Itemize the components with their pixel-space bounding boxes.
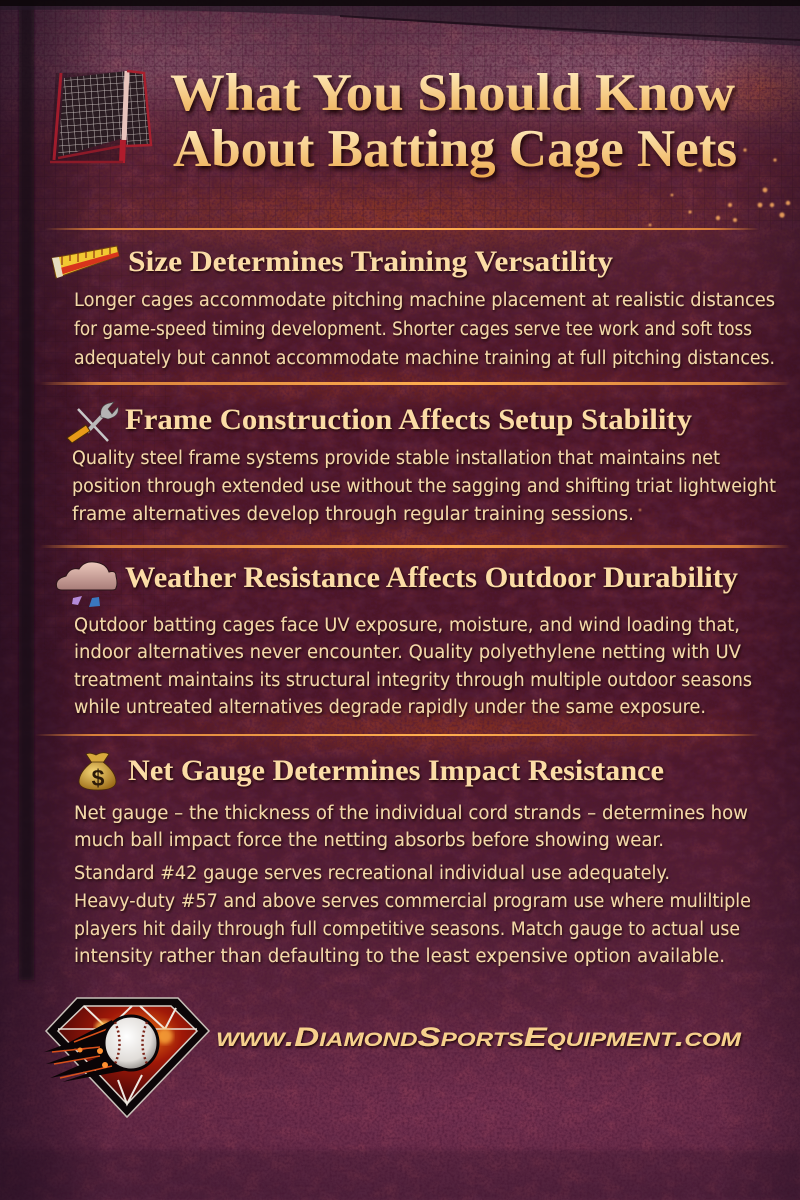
panel: gauge [74,753,751,967]
divider: size and frame [40,382,790,385]
text: weather body: treatment maintains its structural integrity through multiple outdoor seasons [74,670,752,691]
text: gauge body one [74,803,748,851]
icon: money bag [79,753,116,791]
icon: storm cloud [56,562,117,607]
heading: size: Size Determines Training Versatility [128,245,613,278]
website url: www.DiamondSportsEquipment.com [216,1022,742,1052]
icon: money bag: $ [92,765,105,791]
icon: crossed tools [67,402,118,443]
divider: top [45,228,760,230]
heading: weather: Weather Resistance Affects Outdoor Durability [125,561,738,594]
text: frame body: frame alternatives develop through regular training sessions. [72,504,634,525]
icon: ruler [52,246,119,278]
text: gauge body two: intensity rather than defaulting to the least expensive option available. [74,946,725,967]
title: About Batting Cage Nets [173,120,737,178]
text: gauge body one: Net gauge – the thickness of the individual cord strands – determines how [74,803,748,824]
text: size body [74,290,775,369]
text: frame body [72,448,776,525]
text: gauge body two: players hit daily through full competitive seasons. Match gauge to actual use [74,919,740,940]
heading: gauge: Net Gauge Determines Impact Resistance [128,754,664,787]
panel: weather [56,561,752,718]
text: gauge body two [74,863,751,967]
title: What You Should Know [170,64,735,122]
text: weather body [74,615,752,718]
text: size body: Longer cages accommodate pitching machine placement at realistic distances [74,290,775,311]
text: frame body: position through extended use without the sagging and shifting triat lightweight [72,476,776,497]
text: frame body: Quality steel frame systems provide stable installation that maintains net [72,448,720,469]
text: weather body: Qutdoor batting cages face UV exposure, moisture, and wind loading that, [74,615,740,636]
text: gauge body two: Heavy-duty #57 and above serves commercial program use where muliltiple [74,891,751,912]
icon: batting net goal [50,71,152,163]
text: weather body: while untreated alternatives degrade rapidly under the same exposure. [74,697,706,718]
text: gauge body two: Standard #42 gauge serves recreational individual use adequately. [74,863,670,884]
heading: frame: Frame Construction Affects Setup Stability [125,403,692,436]
panel: frame [67,402,776,525]
divider: frame and weather [40,545,790,548]
text: weather body: indoor alternatives never encounter. Quality polyethylene netting with UV [74,642,741,663]
text: size body: for game-speed timing development. Shorter cages serve tee work and soft toss [74,319,752,340]
title [170,64,737,178]
divider: weather and gauge [35,734,760,736]
logo: diamond with baseball [44,998,209,1117]
text: gauge body one: much ball impact force the netting absorbs before showing wear. [74,830,664,851]
panel: size [52,245,775,369]
